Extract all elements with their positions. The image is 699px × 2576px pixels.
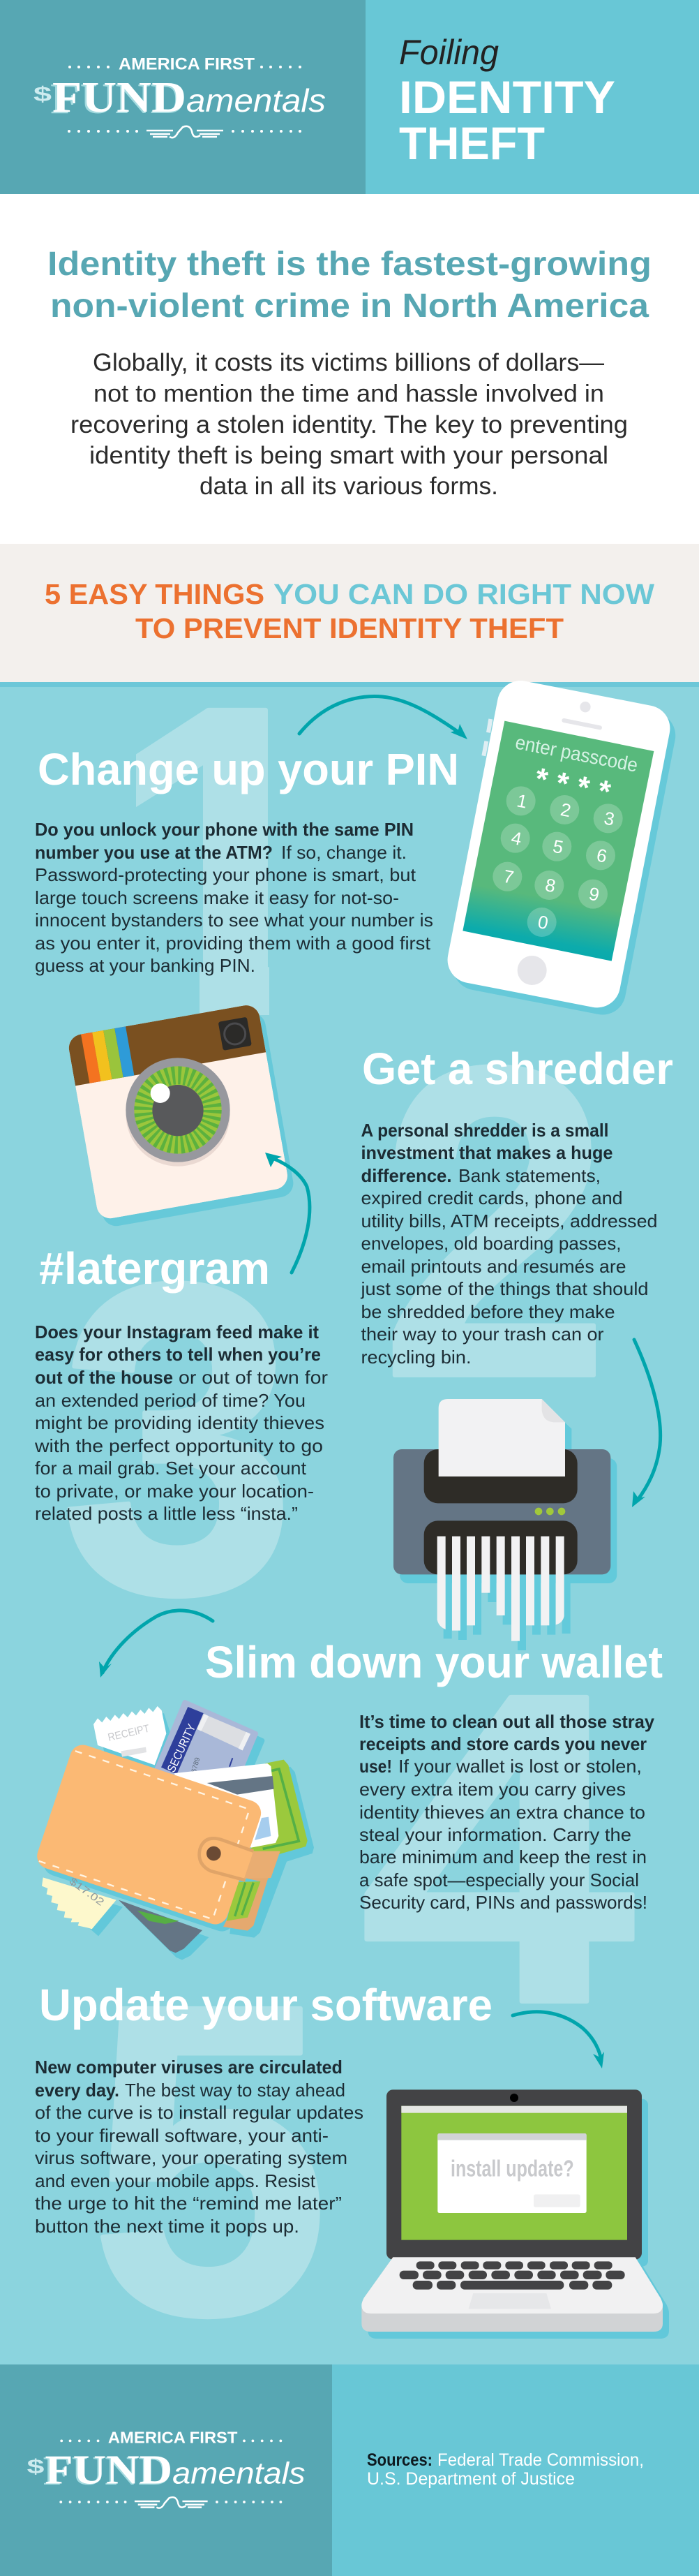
tip 4: text: If your wallet is lost or stolen, [398, 1756, 642, 1777]
panel: tips background [0, 683, 699, 2364]
wallet shadow [40, 1709, 314, 1960]
tip 3: text: Does your Instagram feed make it [35, 1322, 319, 1342]
logo: America First Fundamentals [33, 54, 326, 138]
arrow to laptop [513, 2012, 604, 2068]
intro paragraph: Globally, it costs its victims billions of dollars— [93, 349, 604, 376]
icon: phone: * [574, 769, 593, 806]
title: Foiling Identity Theft: THEFT [399, 117, 545, 169]
title: Foiling Identity Theft: IDENTITY [399, 71, 615, 123]
icon: laptop [361, 2089, 669, 2339]
band heading: TO PREVENT IDENTITY THEFT [135, 612, 564, 644]
tip 1: text: innocent bystanders to see what your number is [35, 910, 433, 931]
tip 4: text: It’s time to clean out all those stray [359, 1711, 655, 1732]
tip 4: text: steal your information. Carry the [359, 1824, 631, 1845]
icon: phone: 9 [587, 883, 601, 905]
panel: footer right [332, 2364, 699, 2576]
icon: phone: 7 [502, 866, 516, 888]
tip 3: text: to private, or make your location- [35, 1481, 314, 1502]
footer logo [27, 2429, 306, 2508]
tip 3: text: an extended period of time? You [35, 1390, 306, 1411]
tip 5: text: the urge to hit the “remind me later” [35, 2193, 342, 2214]
panel: footer left [0, 2364, 332, 2576]
intro heading: Identity theft is the fastest-growing [47, 246, 652, 283]
logo: America First Fundamentals: amentals [186, 82, 326, 119]
tip 2: text: their way to your trash can or [361, 1324, 604, 1345]
tip 4: heading: Slim down your wallet [205, 1637, 663, 1687]
tip 5: text: virus software, your operating system [35, 2147, 347, 2168]
logo: America First Fundamentals: FUND [52, 74, 186, 121]
title: Foiling Identity Theft: Foiling [399, 33, 499, 72]
icon: phone: * [595, 773, 614, 810]
icon: shredder [393, 1399, 617, 1650]
tip 1: text: number you use at the ATM? [35, 842, 273, 863]
tip 2: text: email printouts and resumés are [361, 1256, 626, 1277]
tip 5: text [35, 2057, 363, 2237]
tip 5: text: New computer viruses are circulated [35, 2057, 343, 2078]
icon: instagram camera [67, 1003, 296, 1228]
arrow to phone [299, 697, 467, 739]
intro paragraph [70, 349, 628, 500]
icon: wallet [33, 1702, 314, 1960]
icon: phone: * [532, 762, 551, 797]
intro paragraph: identity theft is being smart with your personal [89, 442, 608, 469]
tip 1: text: guess at your banking PIN. [35, 955, 255, 976]
icon: phone: 0 [536, 911, 550, 933]
icon: phone: 6 [595, 844, 609, 867]
tip 3: text: for a mail grab. Set your account [35, 1458, 307, 1479]
footer logo: FUND [43, 2448, 172, 2494]
tip 2: text [360, 1120, 657, 1368]
tip 2: text: utility bills, ATM receipts, addressed [361, 1211, 657, 1231]
tip 5: text: The best way to stay ahead [125, 2080, 345, 2101]
numeral 1: 1 [102, 614, 348, 1109]
tip 1: text: Do you unlock your phone with the same PIN [35, 819, 414, 840]
tip 2: text: difference. [361, 1165, 452, 1186]
icon: laptop: install update? [451, 2156, 574, 2182]
sources: Sources: [367, 2450, 433, 2470]
tip 4: text: bare minimum and keep the rest in [359, 1846, 647, 1867]
arrow to instagram [265, 1153, 310, 1273]
panel: header left [0, 0, 366, 194]
title: Foiling Identity Theft [399, 33, 615, 169]
footer logo: $ [27, 2456, 45, 2478]
tip 3: text: related posts a little less “insta.” [35, 1503, 298, 1524]
sources [367, 2450, 644, 2489]
tip 3: text: with the perfect opportunity to go [34, 1435, 323, 1456]
tip 4: text: receipts and store cards you never [359, 1733, 647, 1754]
icon: wallet: RECEIPT [107, 1723, 151, 1744]
icon: phone: 8 [543, 874, 557, 896]
icon: phone: * [553, 766, 572, 801]
tip 5: text: button the next time it pops up. [35, 2216, 299, 2237]
tip 2: text: recycling bin. [361, 1347, 472, 1368]
footer logo: amentals [172, 2456, 306, 2490]
icon: phone: enter passcode [513, 731, 640, 776]
tip 5: text: to your firewall software, your anti- [35, 2125, 329, 2146]
tip 1: text: Password-protecting your phone is smart, but [35, 864, 416, 885]
tip 3: text: or out of town for [179, 1367, 328, 1388]
sources: Federal Trade Commission, [437, 2450, 644, 2470]
tip 5: text: of the curve is to install regular updates [35, 2102, 363, 2123]
tip 3: text [34, 1322, 328, 1524]
tip 5: text: and even your mobile apps. Resist [35, 2170, 316, 2191]
tip 2: text: be shredded before they make [361, 1301, 615, 1322]
intro paragraph: not to mention the time and hassle involved in [93, 380, 604, 408]
arrow to shredder [632, 1340, 661, 1507]
tip 1: text: If so, change it. [281, 842, 407, 863]
icon: phone: 1 [515, 790, 529, 813]
band heading: YOU CAN DO RIGHT NOW [273, 578, 654, 610]
logo: America First Fundamentals: FUND [50, 75, 186, 123]
logo: America First Fundamentals: $ [33, 83, 52, 106]
tip 4: text: every extra item you carry gives [359, 1779, 626, 1800]
tip 4: text [359, 1711, 655, 1913]
numeral 5: 5 [89, 1913, 330, 2407]
icon: wallet: SECURITY [165, 1722, 198, 1775]
icon: phone: 4 [509, 827, 523, 850]
tip 2: text: expired credit cards, phone and [361, 1187, 622, 1208]
numeral 4: 4 [359, 1601, 638, 2096]
band heading: 5 EASY THINGS [45, 578, 264, 610]
icon: wallet: 6789 [190, 1756, 202, 1774]
tip 3: text: might be providing identity thieves [35, 1412, 324, 1433]
footer logo: FUND [45, 2446, 172, 2492]
tip 1: text [35, 819, 433, 976]
tip 4: text: Security card, PINs and passwords! [359, 1892, 647, 1913]
tip 1: text: large touch screens make it easy for not-so- [35, 887, 399, 908]
icon: phone [444, 676, 679, 1019]
tip 4: text: a safe spot—especially your Social [359, 1870, 639, 1890]
icon: phone: 2 [559, 799, 573, 821]
logo: America First Fundamentals: AMERICA FIRST [119, 54, 255, 74]
tip 3: text: out of the house [35, 1367, 173, 1388]
panel: band [0, 544, 699, 683]
intro heading: non-violent crime in North America [50, 288, 649, 325]
panel: header right [366, 0, 699, 194]
icon: wallet: $17.02 [67, 1876, 106, 1909]
icon: phone: 5 [551, 836, 565, 858]
tip 2: text: A personal shredder is a small [361, 1120, 608, 1141]
tip 3: heading: #latergram [39, 1243, 270, 1294]
tip 3: text: easy for others to tell when you’re [35, 1344, 321, 1365]
tip 2: text: Bank statements, [458, 1165, 601, 1186]
panel: intro [0, 194, 699, 544]
arrow to wallet [99, 1611, 213, 1678]
tip 2: text: investment that makes a huge [361, 1142, 612, 1163]
icon: phone: 3 [602, 807, 616, 830]
intro heading [47, 246, 652, 325]
tip 5: heading: Update your software [39, 1980, 493, 2030]
tip 1: text: as you enter it, providing them with a good first [35, 933, 431, 954]
tip 4: text: use! [359, 1756, 392, 1777]
tip 1: heading: Change up your PIN [38, 744, 459, 794]
tip 2: text: just some of the things that should [360, 1278, 649, 1299]
intro paragraph: data in all its various forms. [200, 473, 498, 500]
intro paragraph: recovering a stolen identity. The key to preventing [70, 411, 628, 438]
tip 2: text: envelopes, old boarding passes, [361, 1233, 621, 1254]
tip 4: text: identity thieves an extra chance to [359, 1802, 645, 1823]
band heading [45, 578, 654, 644]
numeral 3: 3 [59, 1192, 296, 1686]
footer logo: AMERICA FIRST [108, 2429, 238, 2447]
numeral 2: 2 [380, 975, 610, 1470]
sources: U.S. Department of Justice [367, 2469, 575, 2489]
tip 5: text: every day. [35, 2080, 119, 2101]
tip 2: heading: Get a shredder [362, 1044, 673, 1094]
